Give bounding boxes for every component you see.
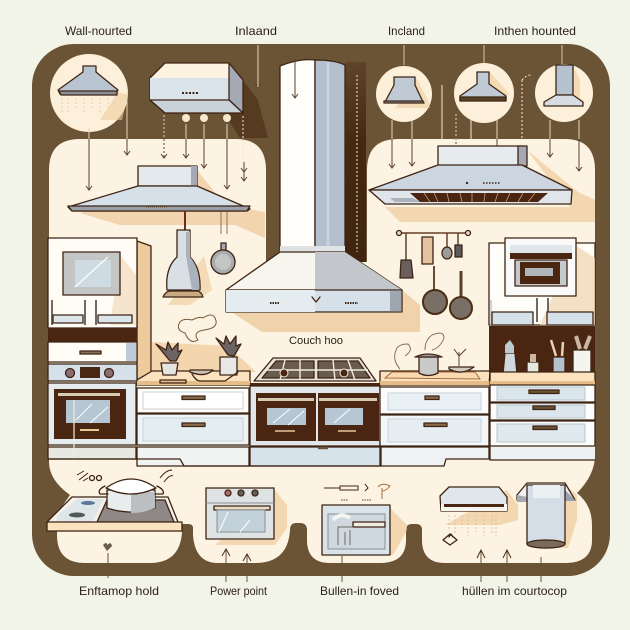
pendant lamp [163,211,212,305]
bottom: slim hood [440,487,518,545]
marker under hob [103,543,112,578]
far right drawers [490,385,595,460]
arrows to power point [222,549,251,582]
heading: kitchen mounted: Inthen hounted [494,24,576,38]
heading: wall-mounted: Wall-nourted [65,24,132,38]
pale segments of arrows over the brown frame [89,45,579,139]
label: cook hood: Couch hoo [289,335,343,347]
label: built-in countertop: hüllen im courtocop [462,584,567,598]
double oven [250,386,380,466]
icon circle: island hood [376,66,432,122]
bottom: built-in oven icon [206,488,287,545]
centre drawers [137,388,249,466]
right counter with pot and steam [380,333,490,385]
label: built-in stove: Bullen-in foved [320,584,399,598]
left hood shadow [80,170,265,238]
line below built-in oven [341,556,343,582]
left bottom line above hob [48,459,381,466]
right hood shadow [385,150,595,222]
arrow on chimney [294,60,296,98]
dark band [48,328,137,342]
right upper cabinet with microwave [489,238,595,325]
right drawers [380,387,489,466]
bottom: cooktop hob with pot [47,470,182,532]
arrows above right hood [392,45,579,171]
left white drawer [48,342,137,362]
shadow under central hood [233,290,420,332]
central chimney hood [226,60,402,312]
arrows to built-in countertop [477,550,541,582]
dashed line right of chimney [356,75,358,252]
right hood [369,146,572,204]
dark shadow strip beside chimney [345,62,366,267]
hanging pans [423,266,472,319]
icon circle: chimney hood [535,64,593,122]
heading: inland: Inlaand [235,24,277,38]
heading: island: Incland [388,24,425,38]
arrows from top icons to left hood [89,45,258,190]
left wall oven [48,383,136,460]
backsplash utensils [503,336,591,377]
brown frame [32,44,610,576]
far right counter [490,372,595,385]
shaded wall behind left plants [152,342,256,372]
centre counter with plants [137,336,250,385]
icon circle: wall-mounted hood [50,54,128,132]
box hood with hanging arrows [150,63,268,138]
oven control panel [48,364,137,381]
label: countertop hood: Enftamop hold [79,584,159,598]
dark backsplash [489,326,595,373]
steam left [178,315,216,341]
label: power point: Power point [210,584,268,598]
utensil rail [396,230,470,278]
strainer hanging [211,212,235,274]
bottom: cylindrical downdraft [517,483,577,548]
gas cooktop [250,358,380,386]
bottom: diagram over built-in hood [324,484,390,500]
bottom: built-in oven [322,505,407,555]
left hood [68,166,250,211]
left upper cabinet [48,238,137,328]
icon circle: canopy hood [454,63,514,123]
left side tan wall panel [137,241,151,380]
cream background panel [47,139,595,563]
